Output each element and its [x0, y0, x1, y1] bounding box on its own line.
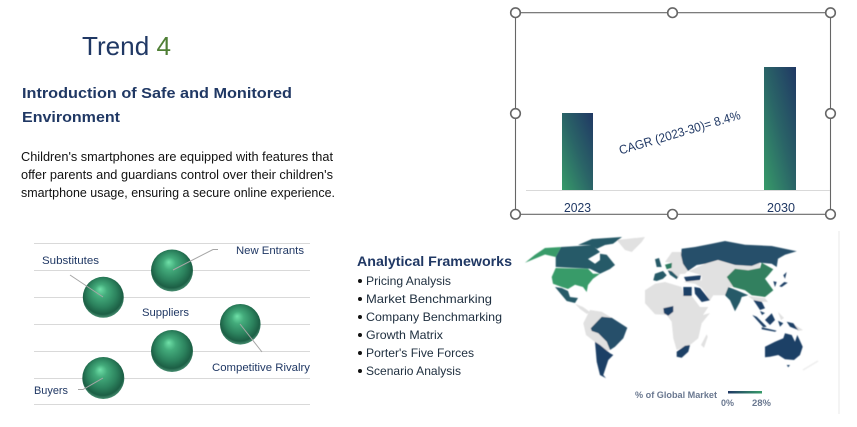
map legend: 28%	[752, 398, 771, 408]
selection frame	[511, 8, 835, 219]
map legend: 0%	[721, 398, 734, 408]
analytical frameworks list	[357, 253, 512, 378]
body text: offer parents and guardians control over their children's	[21, 168, 333, 182]
bar 2030	[764, 67, 796, 190]
green countries	[525, 247, 600, 292]
body text	[21, 150, 335, 200]
map legend	[635, 390, 771, 408]
analytical frameworks list: Growth Matrix	[366, 328, 443, 342]
CAGR label: CAGR (2023-30)= 8.4%	[617, 108, 742, 157]
heading: Environment	[22, 109, 120, 126]
force labels: New Entrants	[236, 245, 305, 257]
analytical frameworks list: Scenario Analysis	[366, 364, 461, 378]
map legend: % of Global Market	[635, 390, 717, 400]
force labels: Suppliers	[142, 307, 190, 319]
force labels	[34, 245, 311, 397]
heading: Introduction of Safe and Monitored	[22, 85, 292, 102]
analytical frameworks list: Porter's Five Forces	[366, 346, 474, 360]
body text: smartphone usage, ensuring a secure online experience.	[21, 186, 335, 200]
five forces diagram	[34, 244, 311, 404]
analytical frameworks list: Market Benchmarking	[366, 292, 492, 306]
China	[727, 263, 773, 297]
navy countries	[595, 272, 803, 378]
force labels: Buyers	[34, 385, 68, 397]
analytical frameworks list: Pricing Analysis	[366, 274, 451, 288]
heading	[22, 85, 292, 126]
force labels: Substitutes	[42, 255, 100, 267]
bar chart panel	[511, 8, 835, 219]
body text: Children's smartphones are equipped with features that	[21, 150, 334, 164]
axis label 2030: 2030	[767, 201, 795, 215]
leader lines	[70, 250, 262, 390]
analytical frameworks list: Company Benchmarking	[366, 310, 502, 324]
other countries	[575, 237, 803, 353]
spheres	[82, 250, 261, 399]
analytical frameworks list: Analytical Frameworks	[357, 253, 512, 269]
teal countries	[555, 237, 797, 350]
world map	[525, 237, 818, 378]
force labels: Competitive Rivalry	[212, 362, 311, 374]
bar 2023	[562, 113, 593, 190]
title: Trend 4	[82, 31, 171, 61]
axis label 2023: 2023	[564, 201, 591, 215]
